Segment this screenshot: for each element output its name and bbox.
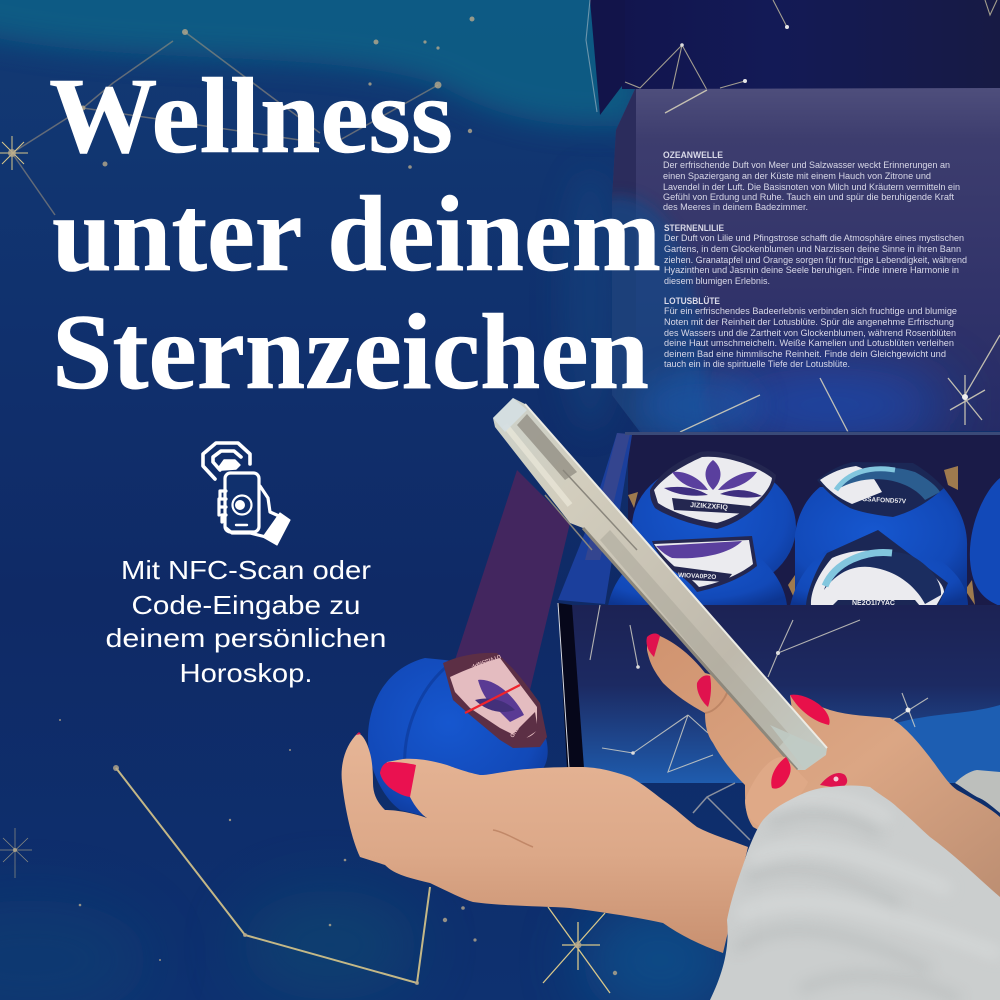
left hand holding bath bomb — [342, 732, 748, 953]
scan laser line — [465, 685, 520, 713]
gift box: top flap — [586, 0, 1000, 115]
NFC caption — [106, 555, 386, 688]
paragraph: Sternenlilie: ziehen. Granatapfel und Orange sorgen für fruchtige Lebendigkeit, während — [664, 255, 967, 265]
paragraph: Sternenlilie: Hyazinthen und Jasmin deine Seele beruhigen. Finde innere Harmonie in — [664, 265, 959, 275]
paragraph: Ozeanwelle — [663, 160, 960, 212]
heading: Lotusblüte: LOTUSBLÜTE — [664, 296, 720, 306]
gift box: open lid with text — [600, 85, 1000, 443]
NFC caption: Mit NFC-Scan oder — [121, 555, 371, 585]
bath bomb: wave front right — [790, 530, 968, 607]
bath bomb: lotus back left: JIZIKZXFIQ — [690, 502, 729, 512]
paragraph: Ozeanwelle: des Meeres in deinem Badezimmer. — [663, 202, 808, 212]
label on bath bomb: UTVISSNPF — [470, 652, 501, 669]
bath bomb: wave front right: NE2O1I7YAC — [852, 600, 895, 607]
bath bomb: edge right — [970, 478, 1000, 606]
bath bomb: lotus front left: WIOVA0P2O — [678, 572, 716, 581]
NFC caption: Code-Eingabe zu — [132, 590, 360, 620]
paragraph: Sternenlilie — [664, 233, 967, 286]
paragraph: Lotusblüte — [664, 306, 957, 369]
icon: phone — [225, 473, 259, 532]
held bath bomb — [368, 652, 548, 820]
icon: NFC waves — [203, 443, 250, 479]
paragraph: Lotusblüte: tauch ein in die spirituelle Tiefe der Lotusblüte. — [664, 359, 850, 369]
lotus petals — [664, 460, 762, 498]
paragraph: Ozeanwelle: einen Spaziergang an der Küste mit einem Hauch von Zitrone und — [663, 171, 931, 181]
paragraph: Lotusblüte: des Wassers und die Zartheit von Glockenblumen, während Rosenblüten — [664, 328, 956, 338]
title: Sternzeichen — [52, 293, 649, 412]
paragraph: Lotusblüte: deine Haut umschmeicheln. Weiße Kamelien und Lotusblüten verleihen — [664, 338, 954, 348]
lower box constellation — [693, 783, 750, 840]
label on bath bomb — [443, 652, 547, 748]
bath bomb: wave back right — [795, 462, 967, 600]
right hand holding phone — [646, 634, 1000, 900]
paragraph: Sternenlilie: diesem blumigen Erlebnis. — [664, 276, 770, 286]
icon: NFC phone scan — [203, 443, 290, 545]
paragraph: Sternenlilie: Gartens, in dem Glockenblumen und Narzissen deine Sinne in ihren Bann — [664, 244, 961, 254]
title: unter deinem — [52, 175, 661, 294]
paragraph: Ozeanwelle: Der erfrischende Duft von Meer und Salzwasser weckt Erinnerungen an — [663, 160, 950, 170]
heading: Ozeanwelle: OZEANWELLE — [663, 150, 723, 160]
NFC caption: deinem persönlichen — [106, 623, 386, 653]
nails: fingers behind phone — [646, 634, 660, 657]
bath bomb: wave back right: GSAFOND57V — [862, 496, 907, 505]
title: Wellness — [49, 57, 453, 176]
icon: hand — [226, 486, 279, 537]
nail: thumb — [380, 762, 416, 797]
paragraph: Ozeanwelle: Gefühl von Erdung und Ruhe. Tauch ein und spür die beruhigende Kraft — [663, 192, 954, 202]
bath bomb: lotus front left — [608, 536, 787, 606]
paragraph: Ozeanwelle: Lavendel in der Luft. Die Basisnoten von Milch und Kräutern vermitteln ein — [663, 182, 960, 192]
gift box: front panel — [558, 603, 1000, 783]
label on bath bomb: GNDIG — [510, 721, 524, 739]
heading: Sternenlilie: STERNENLILIE — [664, 223, 724, 233]
lid text: fragrance descriptions — [663, 150, 967, 369]
sweater sleeve — [710, 770, 1000, 1000]
NFC caption: Horoskop. — [180, 658, 312, 688]
constellations on background — [0, 32, 610, 993]
paragraph: Lotusblüte: deinem Bad eine himmlische Reinheit. Finde dein Gleichgewicht und — [664, 349, 946, 359]
title — [49, 57, 661, 412]
fingertip and nails in front of phone — [697, 675, 847, 827]
gift box: interior — [558, 432, 1000, 606]
stars on background — [8, 16, 617, 985]
bath bombs in box — [608, 451, 1000, 607]
bath bomb: lotus back left — [632, 451, 796, 593]
phone — [493, 398, 827, 770]
paragraph: Lotusblüte: Noten mit der Reinheit der Lotusblüte. Spür die angenehme Erfrischung — [664, 317, 954, 327]
scan beam — [455, 470, 570, 690]
paper filling — [628, 466, 975, 605]
paragraph: Sternenlilie: Der Duft von Lilie und Pfingstrose schafft die Atmosphäre eines mystischen — [664, 233, 964, 243]
paragraph: Lotusblüte: Für ein erfrischendes Badeerlebnis verbinden sich fruchtige und blumige — [664, 306, 957, 316]
